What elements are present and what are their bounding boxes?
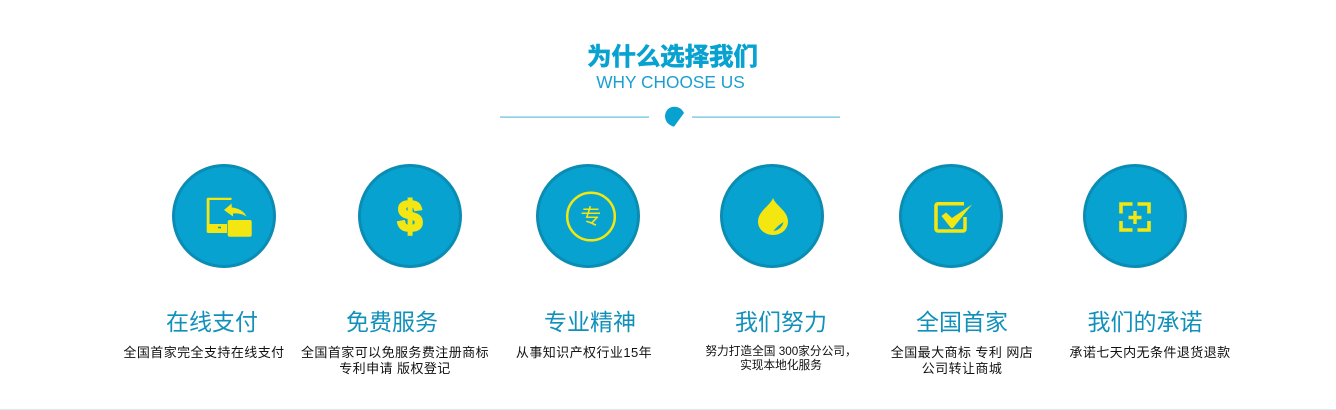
description: our effort: 实现本地化服务	[740, 359, 822, 372]
bottom rule	[0, 408, 1336, 410]
heading: our promise: 我们的承诺	[1088, 309, 1202, 335]
description: free service	[301, 344, 489, 376]
icon circle: dollar sign	[358, 164, 462, 268]
description: free service: 专利申请 版权登记	[339, 360, 451, 376]
icon circle: dollar sign: $	[398, 192, 422, 242]
title: 为什么选择我们	[587, 44, 758, 70]
description: nationwide first: 公司转让商城	[922, 360, 1002, 376]
icon circle: water drop	[720, 164, 824, 268]
description: free service: 全国首家可以免服务费注册商标	[301, 344, 489, 360]
icon circle: promise cross	[1083, 164, 1187, 268]
description: our effort	[705, 344, 857, 372]
description: professional spirit: 从事知识产权行业15年	[516, 344, 652, 360]
description: online payment: 全国首家完全支持在线支付	[123, 344, 285, 360]
description: nationwide first: 全国最大商标 专利 网店	[891, 344, 1033, 360]
icon circle: checkbox	[899, 164, 1003, 268]
heading: our effort: 我们努力	[735, 309, 827, 335]
heading: nationwide first: 全国首家	[916, 309, 1008, 335]
description: our promise: 承诺七天内无条件退货退款	[1069, 344, 1231, 360]
divider with leaf ornament	[500, 106, 840, 127]
icon circle: specialist mark	[536, 164, 640, 268]
heading: online payment: 在线支付	[166, 309, 258, 335]
subtitle: WHY CHOOSE US	[596, 72, 745, 92]
heading: free service: 免费服务	[346, 309, 438, 335]
icon circle: specialist mark: 专	[580, 206, 602, 229]
description: our effort: 努力打造全国 300家分公司，	[705, 344, 857, 358]
icon circle: online payment	[172, 164, 276, 268]
heading: professional spirit: 专业精神	[544, 309, 636, 335]
description: nationwide first	[891, 344, 1033, 376]
